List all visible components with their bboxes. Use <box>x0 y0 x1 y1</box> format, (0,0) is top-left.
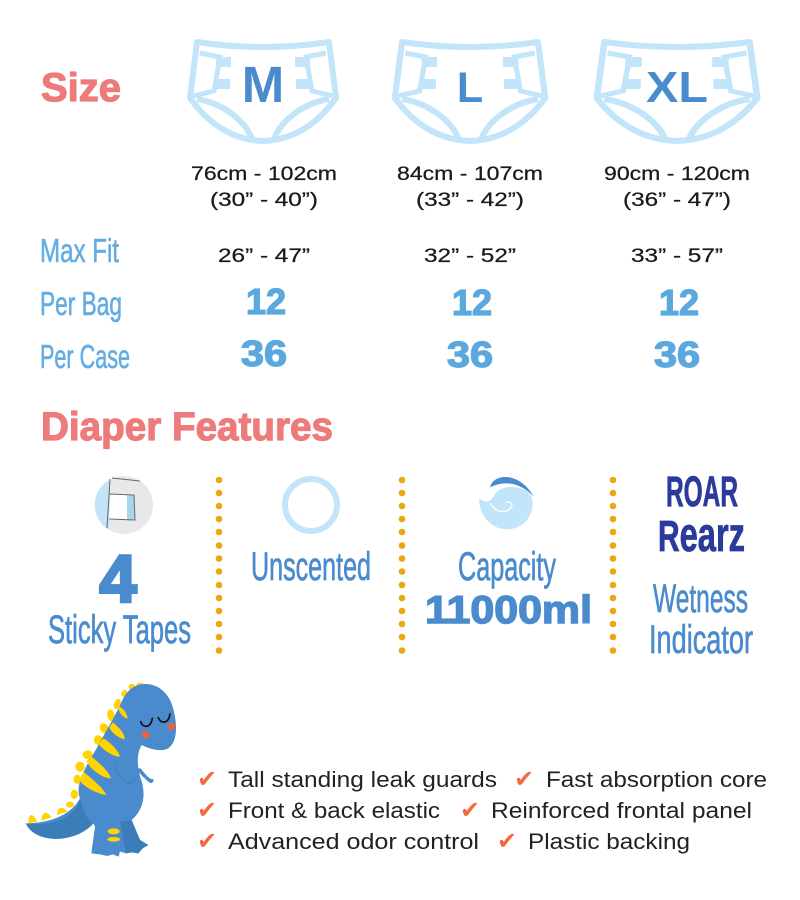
row: Max Fit: 33” - 57” <box>631 246 723 267</box>
checklist: row 2: Front & back elastic <box>228 798 440 823</box>
dotted divider 1 <box>216 477 222 654</box>
checklist: row 2: Reinforced frontal panel <box>491 798 752 823</box>
diaper icon: M: M <box>242 56 284 113</box>
checklist: row 1: ✔ <box>197 765 217 793</box>
row: Max Fit: Max Fit <box>40 232 119 269</box>
checklist: row 1: Tall standing leak guards <box>228 767 497 792</box>
checklist: row 3: Advanced odor control <box>228 829 479 854</box>
checklist: row 3: ✔ <box>197 827 217 855</box>
row: Per Case: 36 <box>447 334 493 375</box>
diaper icon: XL: XL <box>646 63 708 112</box>
waist sizes: M: 76cm - 102cm <box>191 164 337 185</box>
row: Per Bag: 12 <box>659 282 699 323</box>
illustration: blue dinosaur <box>26 683 176 857</box>
icon: unscented ring <box>285 479 337 531</box>
logo: Roar Rearz: Rearz <box>658 509 745 562</box>
waist sizes: XL: 90cm - 120cm <box>604 164 750 185</box>
checklist: row 2: ✔ <box>460 796 480 824</box>
row: Per Bag: 12 <box>246 281 286 322</box>
row: Per Case: 36 <box>241 333 287 374</box>
feature: Capacity 11000ml: 11000ml <box>425 589 592 632</box>
dotted divider 2 <box>399 477 405 654</box>
checklist: row 1: ✔ <box>514 765 534 793</box>
diaper icon: M <box>190 42 336 141</box>
checklist: row 2 <box>197 796 752 824</box>
waist sizes: M <box>191 164 337 211</box>
waist sizes: L: (33” - 42”) <box>416 190 524 211</box>
diaper icon: L: L <box>457 64 483 112</box>
waist sizes: M: (30” - 40”) <box>210 190 318 211</box>
row: Max Fit: 32” - 52” <box>424 246 516 267</box>
feature: 4 Sticky Tapes: 4 <box>99 542 137 617</box>
row: Per Case <box>40 333 700 375</box>
dotted divider 3 <box>610 477 616 654</box>
checklist: row 3: Plastic backing <box>528 829 690 854</box>
heading: Size: Size <box>41 66 121 110</box>
logo: Roar Rearz: ROAR <box>666 468 738 516</box>
feature: Wetness Indicator <box>649 577 753 662</box>
row: Max Fit <box>40 232 723 269</box>
feature: Wetness Indicator: Indicator <box>649 618 753 662</box>
feature: 4 Sticky Tapes: Sticky Tapes <box>48 608 191 652</box>
feature: Unscented: Unscented <box>251 545 371 589</box>
checklist: row 2: ✔ <box>197 796 217 824</box>
checklist: row 1 <box>197 765 767 793</box>
waist sizes: L: 84cm - 107cm <box>397 164 543 185</box>
row: Per Bag <box>40 281 699 323</box>
row: Max Fit: 26” - 47” <box>218 246 310 267</box>
row: Per Case: 36 <box>654 334 700 375</box>
diaper icon: L <box>395 42 545 141</box>
icon: capacity swirl <box>479 477 534 529</box>
waist sizes: XL: (36” - 47”) <box>623 190 731 211</box>
checklist: row 3 <box>197 827 690 855</box>
checklist: row 1: Fast absorption core <box>546 767 767 792</box>
waist sizes: L <box>397 164 543 211</box>
feature: Capacity 11000ml <box>425 545 592 632</box>
row: Per Bag: 12 <box>452 282 492 323</box>
diaper icon: XL <box>597 42 757 141</box>
row: Per Case: Per Case <box>40 338 130 375</box>
heading: Diaper Features: Diaper Features <box>41 405 333 449</box>
icon: sticky tape <box>95 476 153 534</box>
row: Per Bag: Per Bag <box>40 285 122 322</box>
feature: Capacity 11000ml: Capacity <box>458 545 556 589</box>
checklist: row 3: ✔ <box>497 827 517 855</box>
logo: Roar Rearz <box>658 468 745 562</box>
feature: 4 Sticky Tapes <box>48 542 191 652</box>
waist sizes: XL <box>604 164 750 211</box>
